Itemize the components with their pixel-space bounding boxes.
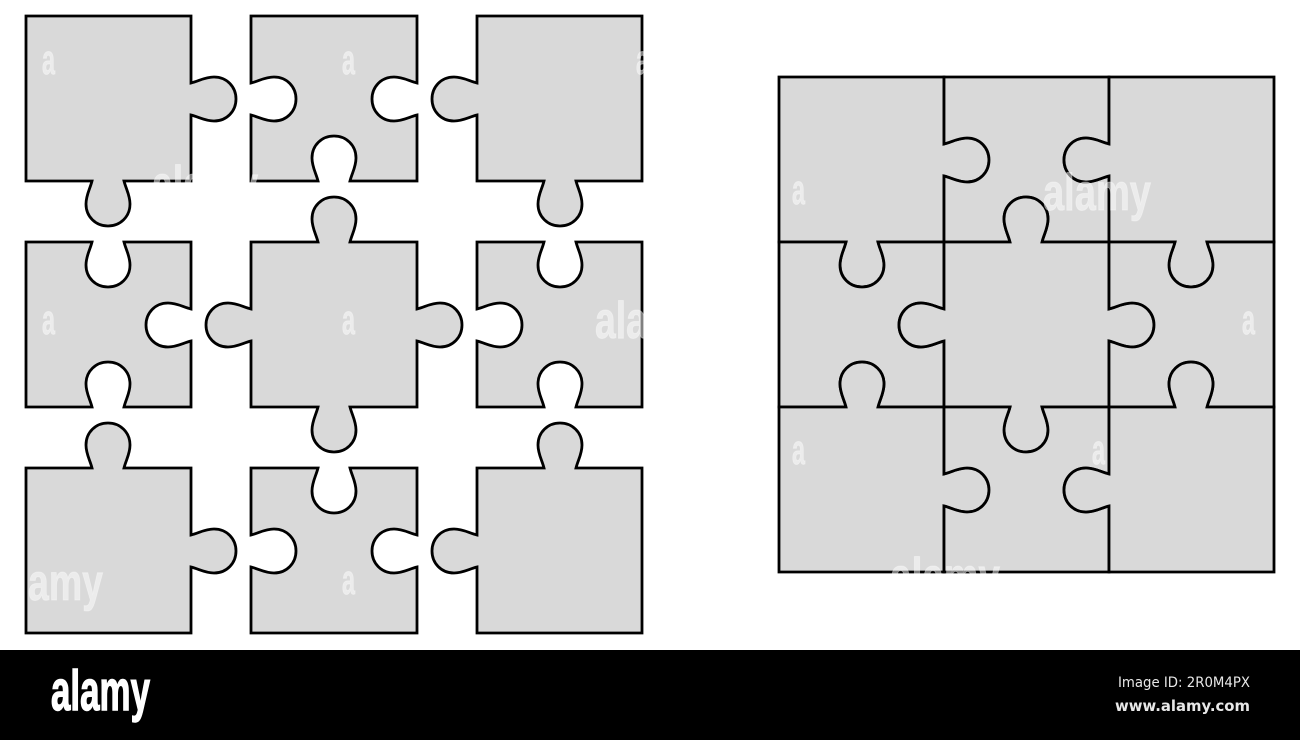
panel: separated puzzle pieces <box>26 16 642 633</box>
watermarks: a <box>636 36 649 83</box>
piece: top middle <box>251 16 417 181</box>
footer logo: alamy <box>51 659 150 723</box>
piece: assembled centre <box>899 197 1154 452</box>
watermarks: a <box>342 296 355 343</box>
watermarks: alamy <box>1043 164 1151 222</box>
panel: assembled puzzle <box>779 77 1274 572</box>
piece: assembled middle left <box>779 242 944 407</box>
piece: assembled top left <box>779 77 989 287</box>
piece: middle left <box>26 242 191 407</box>
piece: centre <box>206 197 462 452</box>
watermarks: a <box>42 36 55 83</box>
watermarks: a <box>792 166 805 213</box>
piece: assembled bottom left <box>779 362 989 572</box>
piece: bottom left <box>26 423 236 633</box>
watermarks: alamy <box>595 292 701 350</box>
piece: assembled middle right <box>1109 242 1274 407</box>
watermarks: a <box>342 556 355 603</box>
piece: assembled bottom middle <box>944 407 1109 572</box>
piece: bottom middle <box>251 468 417 633</box>
watermarks: a <box>792 426 805 473</box>
watermarks: alamy <box>890 548 1000 606</box>
piece: top left <box>26 16 236 226</box>
watermarks: a <box>1092 426 1105 473</box>
watermarks: alamy <box>152 156 258 214</box>
piece: top right <box>432 16 642 226</box>
footer bar <box>0 650 1300 740</box>
watermarks: a <box>1242 296 1255 343</box>
watermarks: a <box>42 296 55 343</box>
piece: assembled top right <box>1064 77 1274 287</box>
piece: middle right <box>477 242 642 407</box>
piece: assembled bottom right <box>1064 362 1274 572</box>
website: www.alamy.com <box>1115 697 1250 715</box>
image id: Image ID: 2R0M4PX <box>1118 675 1250 691</box>
watermarks: a <box>342 36 355 83</box>
watermarks: amy <box>28 554 103 612</box>
piece: assembled top middle <box>944 77 1109 242</box>
piece: bottom right <box>432 423 642 633</box>
watermarks <box>28 36 1255 612</box>
